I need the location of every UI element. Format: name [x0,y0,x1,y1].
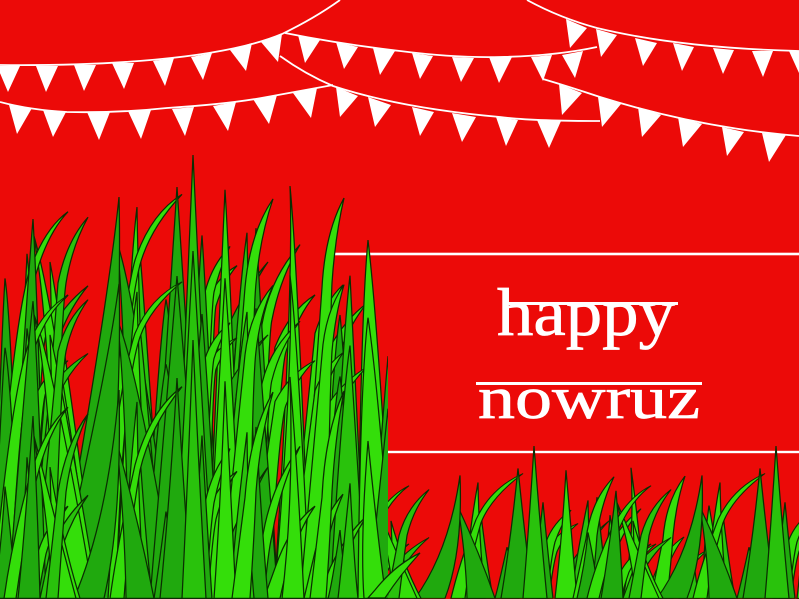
grass: lower right cluster [335,446,733,598]
bunting: lower middle string with flags [280,56,600,148]
greeting: happy: happy [497,274,675,350]
grass: main clump [0,155,398,598]
greeting: nowruz: nowruz [478,365,700,431]
white rule above greeting [333,253,799,255]
bunting: lower left string with flags [0,85,333,140]
grass: foreground curved blade [368,553,420,598]
white rule below greeting [388,451,799,453]
bunting: lower right string with flags [543,79,799,162]
grass: far right cluster [577,446,799,598]
bunting: upper left string with flags [0,0,340,92]
bunting: upper middle string with flags [285,33,597,83]
bunting: upper right string with flags [527,0,799,77]
